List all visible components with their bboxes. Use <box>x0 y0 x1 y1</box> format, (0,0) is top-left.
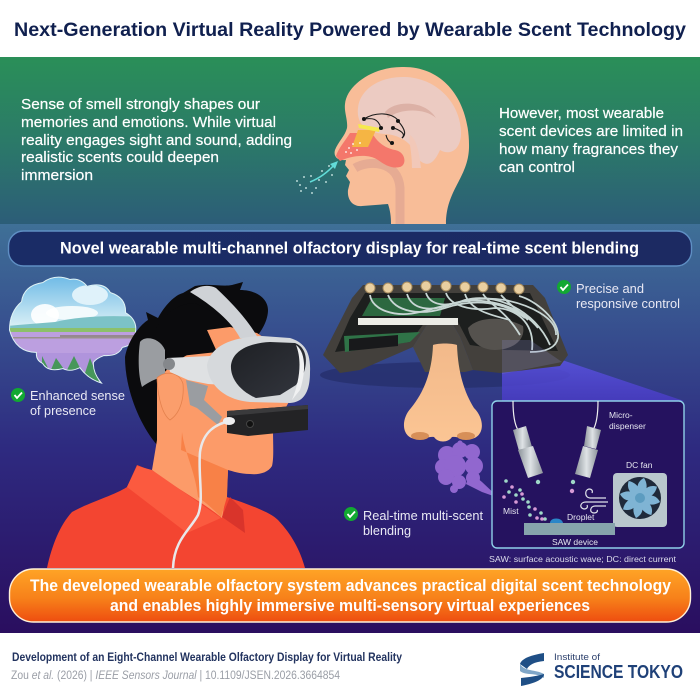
panel: olfactory display system <box>0 224 700 633</box>
nasal cavity <box>336 133 404 168</box>
cable <box>173 421 230 568</box>
label: real-time multi-scent blending: blending <box>363 523 411 538</box>
footer citation: Development of an Eight-Channel Wearable Olfactory Display for Virtual Reality <box>12 652 403 664</box>
footer citation <box>11 652 403 682</box>
icon: head cross-section with olfactory pathway <box>296 67 469 224</box>
icon: droplet on SAW device <box>550 518 563 523</box>
arrows: olfactory signal pathway <box>362 114 405 144</box>
banner: system heading <box>8 231 692 266</box>
label: precise and responsive control: Precise and <box>576 281 644 296</box>
round housing <box>468 319 523 350</box>
text block: sense of smell: memories and emotions. While virtual <box>21 115 276 131</box>
panel: background and motivation <box>0 57 700 224</box>
callout: conclusion <box>10 569 690 622</box>
ear <box>157 373 183 420</box>
side arm <box>167 345 225 385</box>
label: micro-dispenser: Micro- <box>609 410 633 420</box>
device interior <box>335 293 558 352</box>
text block: device limitation: However, most wearable <box>499 106 664 122</box>
panel: inset of scent generator <box>492 401 684 548</box>
callout: conclusion: and enables highly immersive multi-sensory virtual experiences <box>110 596 590 615</box>
label: enhanced sense of presence <box>11 388 125 418</box>
text block: sense of smell <box>21 97 292 184</box>
back cushion <box>139 338 165 387</box>
label: micro-dispenser <box>609 410 646 431</box>
illustration: man wearing VR headset and olfactory display <box>47 282 310 568</box>
label: enhanced sense of presence: of presence <box>30 403 96 418</box>
title: Next-Generation Virtual Reality Powered by Wearable Scent Technology <box>14 19 686 41</box>
face and neck <box>152 327 290 518</box>
illustration: nose <box>404 344 482 442</box>
text block: device limitation: scent devices are limited in <box>499 124 683 140</box>
label: micro-dispenser: dispenser <box>609 421 646 431</box>
icon: DC fan <box>613 473 667 527</box>
front wall centre <box>413 325 473 372</box>
illustration: open eight-channel display device <box>320 281 684 401</box>
icon: right micro-dispenser <box>575 401 601 478</box>
shirt <box>47 465 305 568</box>
label: DC fan: DC fan <box>626 460 653 470</box>
label: enhanced sense of presence: Enhanced sense <box>30 388 125 403</box>
icon: SAW device <box>524 523 615 535</box>
droplets and mist <box>502 479 575 521</box>
circuit boards <box>362 298 445 316</box>
throat and oral cavity <box>355 163 400 224</box>
zoom beam over device <box>502 340 562 374</box>
footer citation: Zou et al. (2026) | IEEE Sensors Journal | 10.1109/JSEN.2026.3664854 <box>11 670 341 682</box>
label: precise and responsive control <box>557 280 680 311</box>
headset strap <box>190 286 259 340</box>
icon: thought cloud with lavender field <box>5 275 140 385</box>
olfactory display box <box>227 405 308 436</box>
hair back <box>125 282 268 445</box>
device body <box>323 285 568 373</box>
label: SAW device: SAW device <box>552 537 598 547</box>
text block: sense of smell: reality engages sight and sound, adding <box>21 133 292 149</box>
label: real-time multi-scent blending: Real-time multi-scent <box>363 508 483 523</box>
icon: scent plume <box>435 440 499 498</box>
text block: device limitation <box>499 106 683 176</box>
lower strap <box>186 380 222 425</box>
arrow: inhaled scent <box>296 161 338 194</box>
text block: device limitation: can control <box>499 160 575 176</box>
tubes <box>370 293 558 352</box>
logo: Institute of Science Tokyo <box>520 652 683 686</box>
connector fittings <box>365 281 524 294</box>
label: precise and responsive control: responsive control <box>576 296 680 311</box>
text block: device limitation: how many fragrances they <box>499 142 679 158</box>
beam to inset <box>502 360 684 401</box>
hair front <box>150 303 228 375</box>
label: mist: Mist <box>503 506 519 516</box>
white strip <box>358 318 458 325</box>
icon: airflow <box>581 489 608 513</box>
shirt collar <box>127 466 221 533</box>
banner: system heading: Novel wearable multi-channel olfactory display for real-time scent blending <box>60 238 639 258</box>
text block: sense of smell: Sense of smell strongly shapes our <box>21 97 260 113</box>
text block: sense of smell: immersion <box>21 168 93 184</box>
label: droplet: Droplet <box>567 512 595 522</box>
label: real-time multi-scent blending <box>344 507 483 538</box>
caption: abbreviations: SAW: surface acoustic wave; DC: direct current <box>489 554 677 564</box>
text block: sense of smell: realistic scents could deepen <box>21 150 219 166</box>
visor <box>207 336 310 403</box>
logo: Institute of Science Tokyo: Institute of <box>554 652 600 663</box>
icon: left micro-dispenser <box>513 401 543 478</box>
